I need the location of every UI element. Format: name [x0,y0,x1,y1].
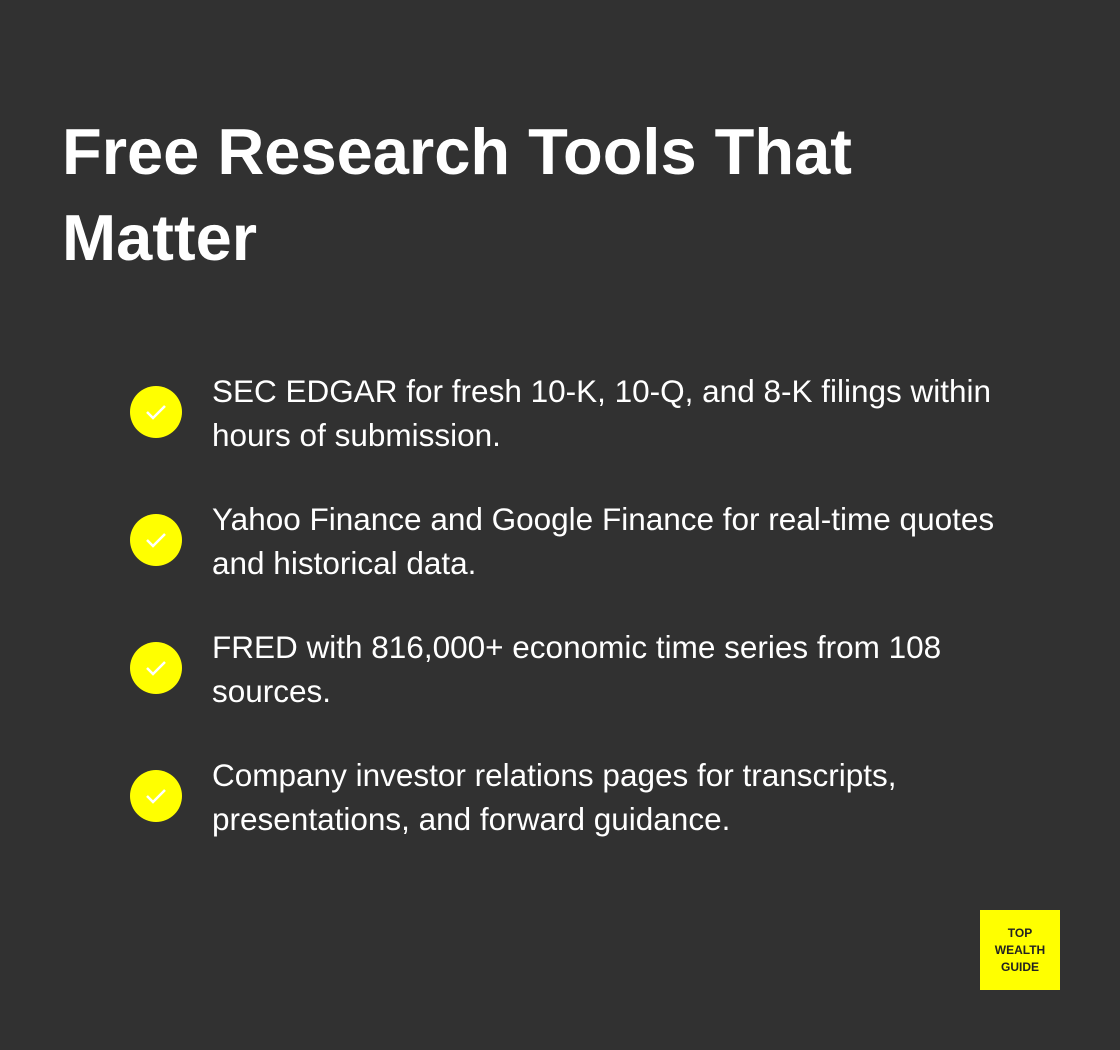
text 3: FRED with 816,000+ economic time series from 108 [212,629,941,665]
item 2 [130,501,994,581]
text 2: Yahoo Finance and Google Finance for real-time quotes [212,501,994,537]
logo: GUIDE [1001,960,1039,974]
item 1 [130,373,991,453]
text 2: and historical data. [212,545,476,581]
icon: check [130,770,182,822]
title: Matter [62,201,257,274]
item 4 [130,757,897,837]
text 2 [212,501,994,581]
text 1: hours of submission. [212,417,501,453]
text 3 [212,629,941,709]
text 4: Company investor relations pages for transcripts, [212,757,897,793]
text 3: sources. [212,673,331,709]
text 4 [212,757,897,837]
logo [980,910,1060,990]
title [62,115,852,274]
logo: WEALTH [995,942,1045,956]
text 1: SEC EDGAR for fresh 10-K, 10-Q, and 8-K filings within [212,373,991,409]
logo: TOP [1008,926,1032,940]
icon: check [130,386,182,438]
text 4: presentations, and forward guidance. [212,801,730,837]
item 3 [130,629,941,709]
text 1 [212,373,991,453]
title: Free Research Tools That [62,115,852,188]
icon: check [130,642,182,694]
icon: check [130,514,182,566]
